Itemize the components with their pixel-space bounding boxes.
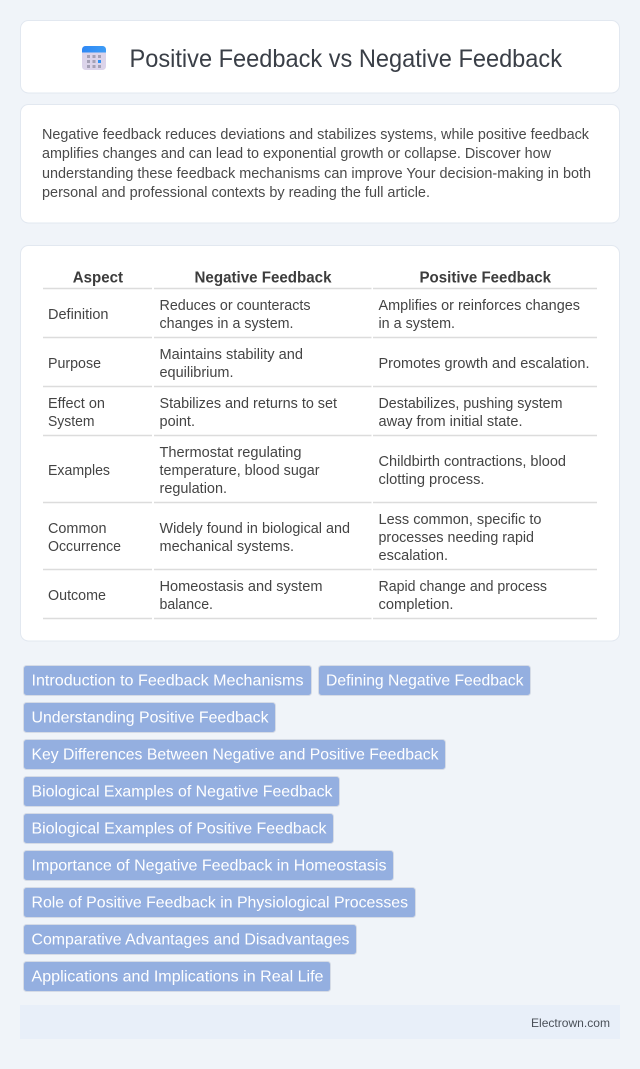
text block: introduction: understanding these feedback mechanisms can improve Your decision-making in both [42,166,591,182]
tag: applications: Applications and Implications in Real Life [32,968,324,986]
table row: common occurrence: Common [48,521,107,537]
table header row: Positive Feedback [420,270,551,286]
tag: key differences [24,740,446,770]
footer [20,1005,620,1039]
tag: physiological: Role of Positive Feedback in Physiological Processes [32,894,408,912]
tag: biological positive [24,814,334,844]
icon: calendar [82,46,106,70]
table row: examples: clotting process. [378,472,484,488]
tag: biological negative [24,776,340,806]
table row: effect on system: point. [160,414,195,430]
table row: outcome: completion. [378,597,454,613]
table row: common occurrence: Occurrence [48,539,121,555]
table row: definition: changes in a system. [160,316,294,332]
tag: biological negative: Biological Examples of Negative Feedback [32,784,333,800]
table row: outcome: Homeostasis and system [160,579,322,595]
tag: defining negative feedback [318,666,530,696]
table row: common occurrence: escalation. [378,548,448,564]
text block: introduction: Negative feedback reduces deviations and stabilizes systems, while positive feedback [42,127,590,143]
table row: outcome: balance. [160,597,213,613]
tag: homeostasis: Importance of Negative Feedback in Homeostasis [32,858,387,874]
table row: purpose: Promotes growth and escalation. [378,356,590,372]
table row: effect on system: away from initial state. [378,414,522,430]
table row: definition: Amplifies or reinforces changes [378,298,580,314]
table row: definition: in a system. [378,316,455,332]
topic tag list [24,666,530,992]
text block: introduction: personal and professional contexts by reading the full article. [42,185,430,201]
table row: purpose: equilibrium. [160,365,234,381]
table row: examples: regulation. [160,481,227,497]
tag: defining negative feedback: Defining Negative Feedback [326,672,524,690]
table row: common occurrence: mechanical systems. [160,539,294,555]
tag: physiological [24,888,416,918]
table row: definition: Reduces or counteracts [160,298,310,314]
tag: advantages: Comparative Advantages and Disadvantages [32,932,350,948]
table row: common occurrence: Less common, specific to [378,512,542,528]
table header row [73,270,551,286]
tag: introduction: Introduction to Feedback Mechanisms [32,672,304,690]
panel: header [20,20,620,93]
text block: introduction [42,127,591,201]
table row: outcome [48,579,547,613]
text block: introduction: amplifies changes and can lead to exponential growth or collapse. Discover how [42,146,552,162]
tag: understanding positive feedback [24,702,276,732]
table row: effect on system: Stabilizes and returns to set [160,396,337,412]
table row: examples: temperature, blood sugar [160,463,320,479]
tag: understanding positive feedback: Understanding Positive Feedback [32,710,269,726]
table row: examples [48,445,566,497]
footer: Electrown.com [531,1016,610,1030]
table row: outcome: Rapid change and process [378,579,547,595]
tag: key differences: Key Differences Between Negative and Positive Feedback [32,746,439,764]
panel: introduction [20,104,620,223]
table row: purpose: Purpose [48,356,101,372]
panel: comparison table [20,246,620,641]
tag: introduction [24,666,312,696]
table row: common occurrence: Widely found in biological and [160,521,350,537]
table row: purpose: Maintains stability and [160,347,303,363]
table row: common occurrence: processes needing rapid [378,530,534,546]
table row: effect on system [48,396,562,430]
table row: examples: Childbirth contractions, blood [378,454,566,470]
table row: definition [48,298,580,332]
table row: common occurrence [48,512,542,564]
tag: homeostasis [24,850,394,880]
table row: effect on system: Destabilizes, pushing system [378,396,562,412]
title: Positive Feedback vs Negative Feedback [130,45,562,73]
tag: advantages [24,924,356,954]
table header row: Negative Feedback [194,270,332,286]
table row: outcome: Outcome [48,588,106,604]
table row: examples: Thermostat regulating [160,445,302,461]
table row: purpose [48,347,590,381]
table row: examples: Examples [48,463,110,479]
tag: applications [24,962,330,992]
table row: definition: Definition [48,307,109,323]
table row: effect on system: System [48,414,94,430]
table row: effect on system: Effect on [48,396,105,412]
table header row: Aspect [73,270,123,286]
tag: biological positive: Biological Examples of Positive Feedback [32,820,327,838]
